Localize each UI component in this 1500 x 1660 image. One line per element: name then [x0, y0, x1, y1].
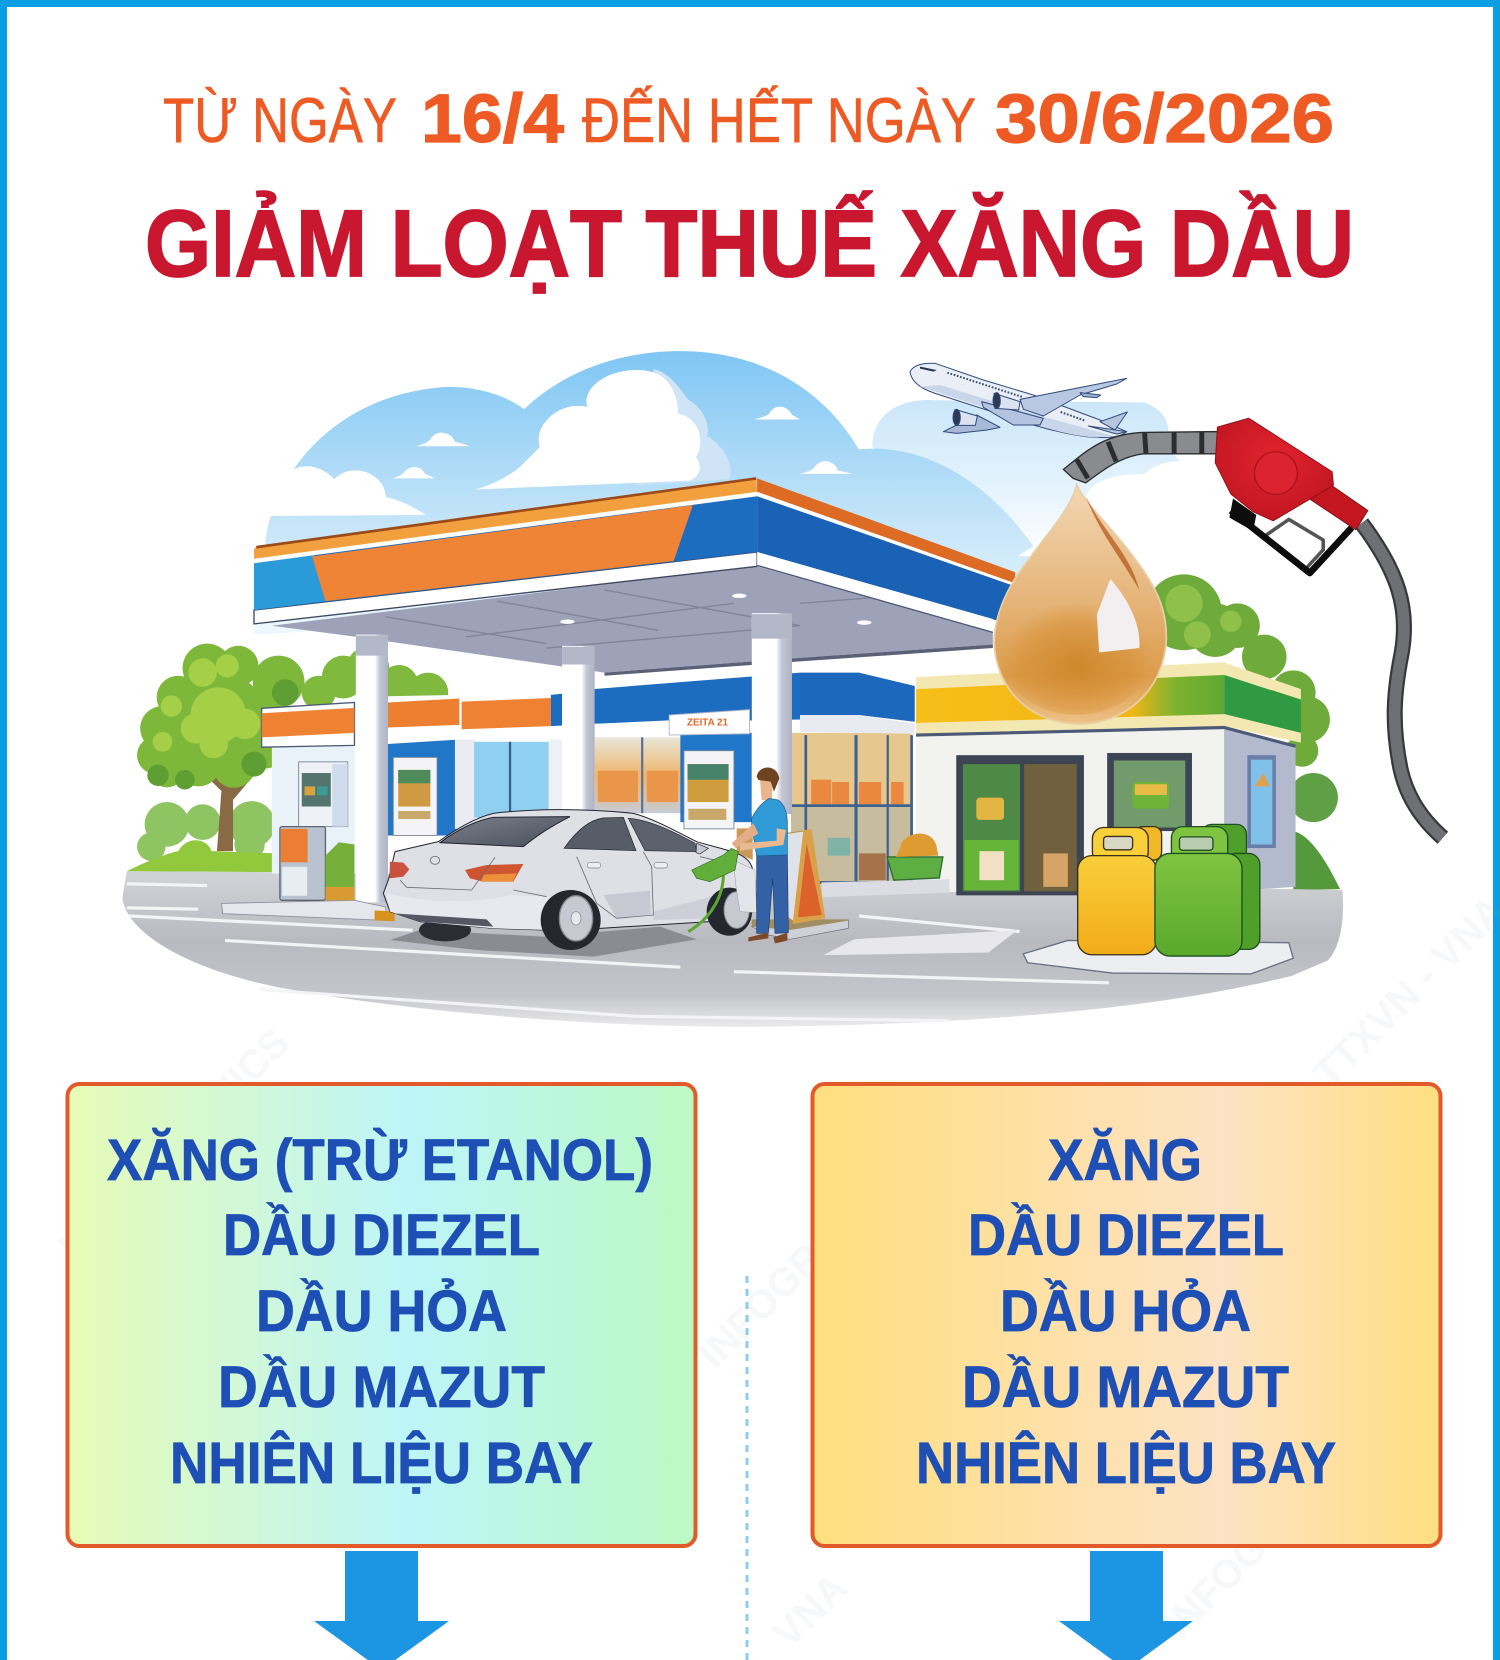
oil drop [994, 485, 1166, 724]
A-frame sign [737, 828, 825, 924]
pillars [356, 613, 792, 903]
tree: left [127, 644, 448, 872]
fuel island and kiosks [221, 751, 734, 921]
title: date range: ĐẾN HẾT NGÀY [582, 85, 976, 156]
canopy [254, 478, 1015, 676]
green hose [688, 875, 723, 932]
left list text: NHIÊN LIỆU BAY [170, 1431, 593, 1496]
left cloud [232, 466, 426, 516]
airplane [910, 363, 1127, 438]
main foliage [137, 644, 304, 788]
right cloud [1018, 461, 1274, 557]
title: date range: 30/6/2026 [995, 80, 1334, 157]
title: date range [163, 80, 1334, 157]
title: date range: 16/4 [421, 80, 564, 157]
right list text: DẦU HỎA [1000, 1279, 1251, 1344]
car shadow [390, 927, 697, 957]
mini clouds [416, 433, 470, 446]
kiosk 1 [299, 762, 348, 827]
panel: right fuel list [812, 1084, 1440, 1546]
left list text: XĂNG (TRỪ ETANOL) [107, 1128, 653, 1193]
person [732, 768, 788, 943]
bushes [137, 801, 275, 861]
back green can [1202, 824, 1260, 949]
watermarks: INFOGRAPHICS [1155, 1398, 1403, 1646]
big cloud [475, 370, 700, 490]
green can [1155, 827, 1242, 956]
rear wheel [419, 919, 471, 941]
title: main heading: GIẢM LOẠT THUẾ XĂNG DẦU [145, 191, 1354, 297]
left list text: DẦU HỎA [256, 1279, 507, 1344]
right list text: XĂNG [1048, 1128, 1202, 1193]
watermarks: VNA [765, 1566, 856, 1656]
trigger guard [1229, 498, 1352, 573]
back yellow can [1135, 827, 1162, 860]
pad [821, 879, 950, 897]
divider [746, 1276, 748, 1660]
watermarks [50, 888, 1500, 1656]
right list text [916, 1128, 1336, 1496]
yellow can [1078, 828, 1156, 955]
station shop: left section: ZEITA 21 [687, 718, 728, 729]
tree: right [1146, 574, 1340, 890]
car, person and nozzle [383, 768, 848, 957]
road [122, 871, 1343, 1027]
left list text [107, 1128, 653, 1496]
right list text: DẦU MAZUT [962, 1355, 1289, 1420]
right list text: NHIÊN LIỆU BAY [916, 1431, 1336, 1496]
wheels [541, 890, 601, 950]
tail lights [389, 862, 409, 878]
watermarks: INFOGRAPHICS [690, 1128, 938, 1376]
back tree [302, 647, 448, 713]
side window [1247, 755, 1276, 848]
car body [383, 810, 757, 930]
fascia [262, 703, 354, 747]
panel: left fuel list [68, 1084, 696, 1546]
green nozzle [692, 848, 738, 882]
big cloud shade [636, 369, 731, 485]
petrol pump nozzle and hose [1063, 418, 1443, 838]
station shop: left section [262, 655, 915, 884]
left list text: DẦU MAZUT [218, 1355, 545, 1420]
kiosk 3 [684, 751, 734, 829]
body lines [400, 852, 743, 918]
right list text: DẦU DIEZEL [968, 1203, 1284, 1268]
left list text: DẦU DIEZEL [223, 1203, 540, 1268]
station shop: right section [821, 662, 1301, 897]
illustration: petrol station [122, 351, 1443, 1027]
car windows [440, 817, 570, 847]
watermarks: INFOGRAPHICS [50, 1020, 298, 1268]
title: date range: TỪ NGÀY [163, 86, 397, 156]
arrow: left [314, 1551, 449, 1660]
fuel cans and stand [1023, 824, 1293, 974]
door [956, 755, 1084, 895]
window [1107, 753, 1192, 831]
goods [811, 780, 904, 804]
sky [232, 351, 1274, 635]
person island [752, 920, 848, 939]
arrow: right [1059, 1551, 1193, 1660]
kiosk 2 [393, 757, 437, 836]
planter [887, 857, 943, 880]
